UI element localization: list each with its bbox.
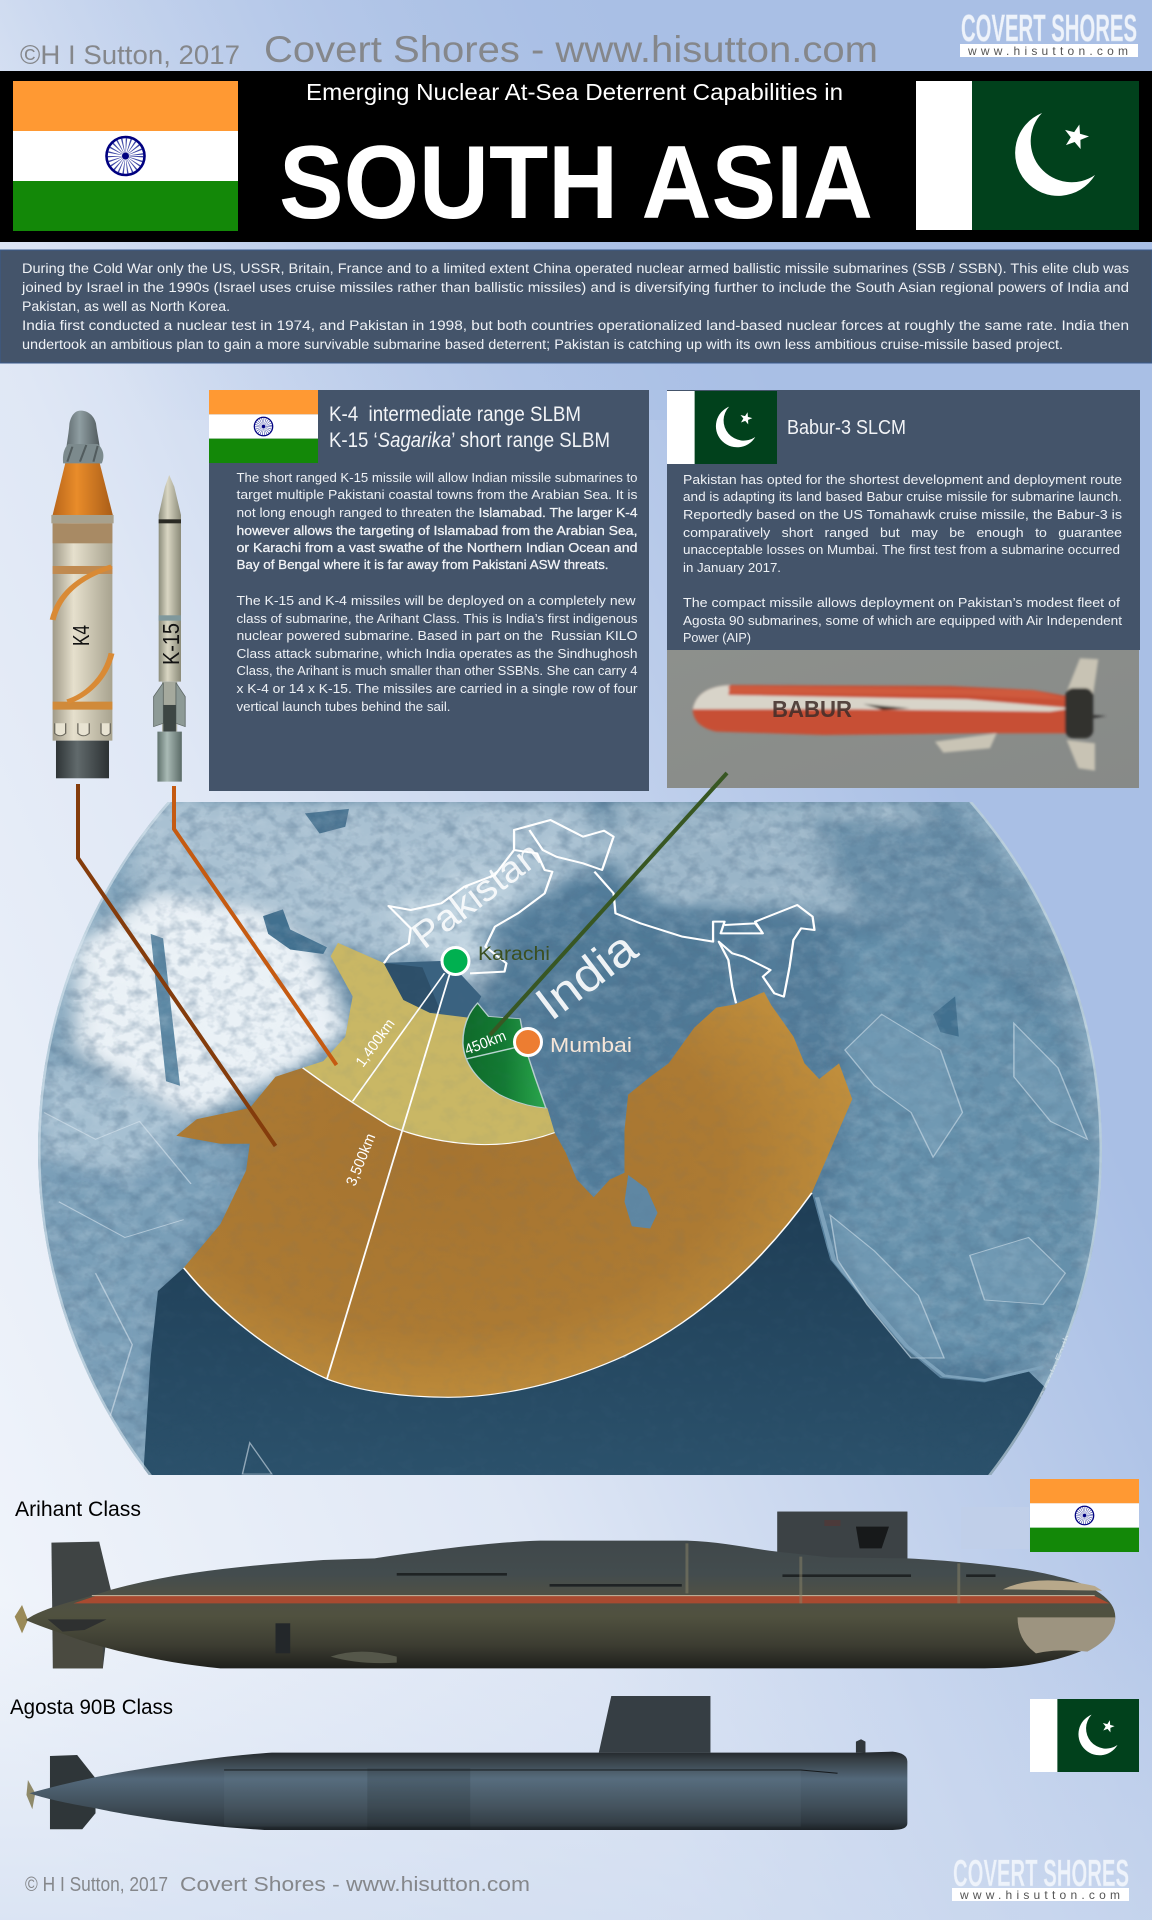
marker: Karachi: [442, 944, 550, 974]
bottom credit line: Covert Shores - www.hisutton.com: [180, 1874, 530, 1896]
text: K-15 and K-4 description: Class attack submarine, which India operates as the Sindhughosh: [236, 646, 638, 661]
terrain texture over range areas: [92, 927, 834, 1398]
missile: K4: [51, 411, 114, 778]
flag: Pakistan panel: [667, 391, 777, 464]
label K-15: K-15: [158, 623, 184, 665]
globe rim highlight: [38, 802, 1102, 1475]
land shading: [29, 800, 1095, 1475]
title band: [0, 71, 1152, 242]
top credit line: ©H I Sutton, 2017: [20, 40, 240, 70]
text: Babur description: in January 2017.: [683, 560, 781, 575]
bottom credit line: © H I Sutton, 2017: [25, 1874, 168, 1896]
Africa outlines: [44, 1001, 272, 1474]
heading: Babur-3: Babur-3 SLCM: [787, 417, 906, 439]
label: 3,500km: 3,500km: [343, 1131, 379, 1188]
top credit line: Covert Shores - www.hisutton.com: [264, 29, 878, 70]
text: Babur description: Agosta 90 submarines, some of which are equipped with Air Independent: [683, 613, 1122, 628]
text: K-15 and K-4 description: target multiple Pakistani coastal towns from the Arabian Sea. It is: [236, 487, 638, 502]
range arcs: [184, 1068, 812, 1397]
text: K-15 and K-4 description: Class, the Arihant is much smaller than other SSBNs. She can carry 4: [236, 663, 638, 678]
logo: Covert Shores bottom: www.hisutton.com: [959, 1888, 1120, 1902]
pointer line: K4 to range: [78, 784, 276, 1146]
text: K-15 and K-4 description: The K-15 and K-4 missiles will be deployed on a completely new: [236, 593, 636, 608]
text: K-15 and K-4 description: Bay of Bengal where it is far away from Pakistani ASW threats.: [236, 557, 608, 572]
globe map: [38, 802, 1102, 1475]
bottom credit line: [25, 1874, 530, 1896]
panel: Pakistan missile: [667, 390, 1140, 650]
text: Babur description: Power (AIP): [683, 630, 751, 645]
coastal sea: [384, 961, 481, 1019]
submarine: Arihant class: [15, 1479, 1139, 1668]
area: K-4 3500km range: [176, 992, 852, 1397]
range areas: [44, 943, 1087, 1475]
label: 1,400km: 1,400km: [352, 1016, 399, 1070]
text: Babur description: The compact missile allows deployment on Pakistan’s modest fleet of: [683, 595, 1120, 610]
pointer line: Babur to range: [490, 773, 727, 1035]
marker: Karachi: Karachi: [478, 944, 550, 965]
heading: India missiles: [329, 403, 610, 452]
flag: India lower: [1030, 1479, 1139, 1552]
flag: India panel: [209, 390, 318, 463]
top credit line: [20, 29, 878, 70]
heading: India missiles: K-4 intermediate range SLBM: [329, 403, 581, 426]
Caspian, gulfs and Red Sea: [305, 809, 349, 833]
text: K-15 and K-4 description: [236, 470, 638, 714]
heading: India missiles: K-15 ‘Sagarika’ short range SLBM: [329, 429, 610, 452]
pointer line: K-15 to range: [174, 786, 336, 1065]
label: 450km: 450km: [462, 1027, 509, 1059]
flag: India header: [13, 81, 238, 231]
text: K-15 and K-4 description: x K-4 or 14 x K-15. The missiles are carried in a single row of four: [236, 681, 638, 696]
intro panel: undertook an ambitious plan to gain a more survivable submarine based deterrent; Pakistan is catching up with its own less ambitious cruise-missile based project.: [22, 337, 1063, 352]
text: K-15 and K-4 description: not long enough ranged to threaten the Islamabad. The larger K-4: [236, 505, 638, 520]
intro panel: India first conducted a nuclear test in 1974, and Pakistan in 1998, but both countries operationalized land-based nuclear forces at roughly the same rate. India then: [22, 318, 1129, 333]
submarine: Agosta class: [10, 1696, 1139, 1830]
label: Arihant: Arihant Class: [15, 1498, 141, 1521]
intro panel: During the Cold War only the US, USSR, Britain, France and to a limited extent China operated nuclear armed ballistic missile submarines (SSB / SSBN). This elite club was: [22, 261, 1129, 276]
label: India: India: [525, 920, 647, 1030]
intro panel: joined by Israel in the 1990s (Israel uses cruise missiles rather than ballistic missiles) and is diversifying further to include the South Asian regional powers of India and: [21, 280, 1129, 295]
text: K-15 and K-4 description: vertical launch tubes behind the sail.: [236, 699, 450, 714]
text: K-15 and K-4 description: however allows the targeting of Islamabad from the Arabian Sea,: [236, 523, 638, 538]
panel: India missiles: [209, 390, 649, 791]
text: Babur description: comparatively short ranged but may be enough to guarantee: [683, 525, 1122, 540]
marker: Mumbai: Mumbai: [550, 1035, 632, 1057]
label on missile: BABUR: [772, 696, 852, 722]
credit: map source: Map from Google Earth: [1017, 1333, 1075, 1451]
area: K-15 1400km range: [303, 943, 555, 1145]
intro panel: [0, 250, 1152, 363]
text: K-15 and K-4 description: or Karachi from a vast swathe of the Northern Indian Ocean and: [236, 540, 638, 555]
South-East Asia islands and coasts: [830, 1014, 1087, 1358]
text: Babur description: Pakistan has opted for the shortest development and deployment route: [683, 472, 1122, 487]
text: K-15 and K-4 description: class of submarine, the Arihant Class. This is India’s first indigenous: [236, 611, 638, 626]
marker: Mumbai: [514, 1028, 632, 1057]
subtitle: Emerging Nuclear At-Sea Deterrent Capabilities in: [306, 79, 843, 105]
faint backing block: [961, 1507, 1029, 1549]
label: Pakistan: Pakistan: [404, 833, 549, 956]
text: Babur description: unacceptable losses on Mumbai. The first test from a submarine occurred: [683, 542, 1120, 557]
flag: Pakistan header: [916, 81, 1139, 230]
label K4: K4: [68, 625, 94, 646]
Sri Lanka gap: [624, 1175, 658, 1229]
text: Babur description: Reportedly based on the US Tomahawk cruise missile, the Babur-3 is: [683, 507, 1122, 522]
terrain texture: [30, 802, 1120, 1475]
text: K-15 and K-4 description: nuclear powered submarine. Based in part on the Russian KILO: [236, 628, 638, 643]
missile: K-15: [154, 475, 185, 782]
area: Babur 450km range: [463, 1003, 546, 1108]
label: Agosta: Agosta 90B Class: [10, 1696, 173, 1719]
deep ocean: [143, 1193, 1047, 1475]
text: Babur description: [683, 472, 1122, 645]
borders of Pakistan and India: [384, 820, 814, 1003]
photo: Babur missile: [667, 650, 1139, 788]
range lines: [327, 973, 450, 1379]
text: K-15 and K-4 description: The short ranged K-15 missile will allow Indian missile submarines to: [236, 470, 638, 485]
main title: SOUTH ASIA: [279, 125, 873, 241]
logo: Covert Shores top: www.hisutton.com: [967, 44, 1128, 58]
text: Babur description: and is adapting its land based Babur cruise missile for submarine launch.: [683, 489, 1122, 504]
flag: Pakistan lower: [1030, 1699, 1139, 1772]
intro panel: Pakistan, as well as North Korea.: [22, 299, 230, 314]
